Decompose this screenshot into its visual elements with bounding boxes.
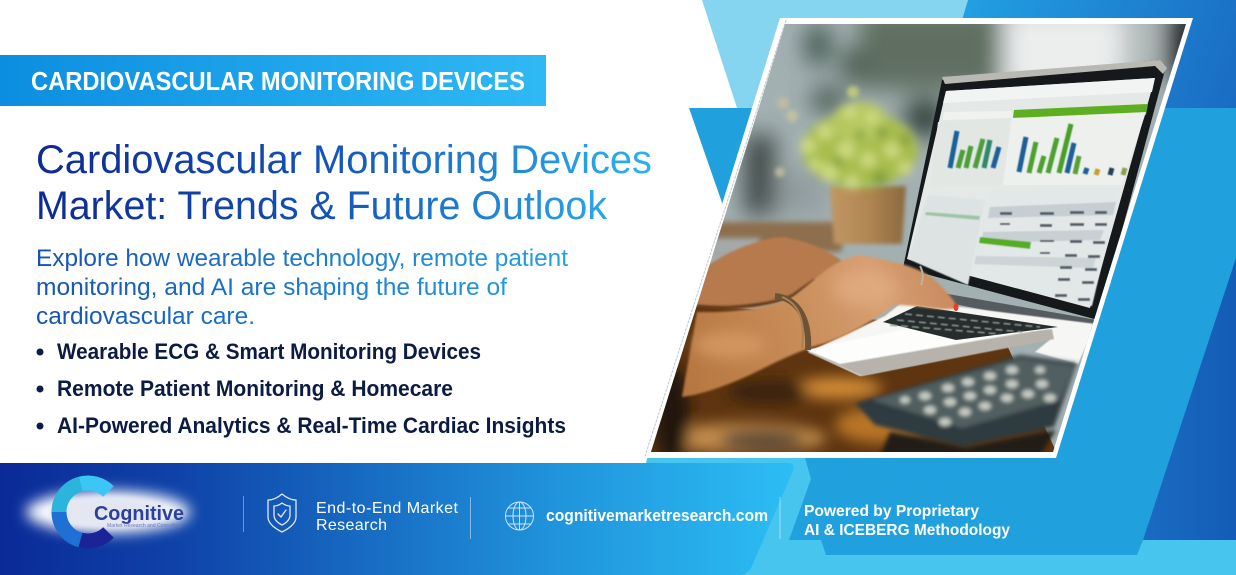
title: [36, 138, 652, 228]
photo: keyboard: [883, 306, 1058, 340]
icon: shield: [268, 494, 296, 532]
divider: [779, 497, 781, 539]
photo frame hairline: [645, 20, 786, 456]
photo: screen data table: [908, 202, 1116, 307]
bullet list: Wearable ECG & Smart Monitoring Devices: [57, 339, 481, 364]
logo: Market Research and Consulting: [107, 523, 181, 529]
background: mid blue shape: [689, 108, 1236, 555]
background: top right blue gradient shape: [936, 0, 1236, 108]
photo: ring and nail: [920, 266, 923, 285]
logo: [26, 483, 190, 541]
footer band: [0, 463, 794, 575]
photo: bokeh dots: [775, 86, 859, 177]
photo: wooden desk: [651, 304, 1054, 452]
title: Cardiovascular Monitoring Devices: [36, 138, 652, 182]
bullet list: [36, 339, 566, 438]
subtitle: [36, 245, 568, 330]
background: light cyan lower strip: [640, 455, 1236, 575]
top banner: [0, 55, 546, 106]
photo: far table: [712, 222, 842, 252]
top banner: CARDIOVASCULAR MONITORING DEVICES: [31, 68, 525, 96]
logo: Cognitive: [94, 503, 184, 525]
photo: screen bar charts: [950, 124, 1125, 175]
photo: calculator: [855, 355, 1077, 456]
text: end-to-end: End-to-End Market: [316, 500, 459, 517]
bullet list: Remote Patient Monitoring & Homecare: [57, 376, 453, 401]
subtitle: Explore how wearable technology, remote patient: [36, 245, 568, 272]
text: website: cognitivemarketresearch.com: [546, 506, 768, 525]
background: pale blue top shape: [702, 0, 968, 110]
photo: laptop screen: [907, 78, 1155, 308]
photo: plant: [800, 102, 918, 189]
photo: front arm and hand: [682, 255, 957, 397]
photo: hand shadow: [697, 280, 815, 307]
text: powered by: Powered by Proprietary: [804, 503, 979, 520]
text: powered by: AI & ICEBERG Methodology: [804, 522, 1010, 539]
logo: C ring segments: [59, 483, 108, 541]
icon: globe: [506, 502, 534, 530]
subtitle: monitoring, and AI are shaping the future of: [36, 274, 507, 301]
background: dark blue lower right wedge: [1143, 258, 1236, 540]
text: powered by: [804, 503, 1010, 539]
subtitle: cardiovascular care.: [36, 303, 255, 330]
photo frame: [643, 18, 1193, 458]
photo: laptop lid: [903, 60, 1165, 320]
bullet list: AI-Powered Analytics & Real-Time Cardiac Insights: [57, 413, 566, 438]
photo: laptop base: [946, 294, 1094, 332]
text: end-to-end: Research: [316, 517, 387, 534]
photo: hands typing on a laptop: [651, 24, 1186, 452]
divider: [242, 496, 244, 532]
photo: rear hand: [695, 237, 845, 308]
text: end-to-end: [316, 500, 459, 534]
divider: [470, 497, 472, 539]
photo: plant pot: [830, 186, 906, 244]
title: Market: Trends & Future Outlook: [36, 184, 608, 228]
photo: bracelet: [775, 296, 808, 350]
